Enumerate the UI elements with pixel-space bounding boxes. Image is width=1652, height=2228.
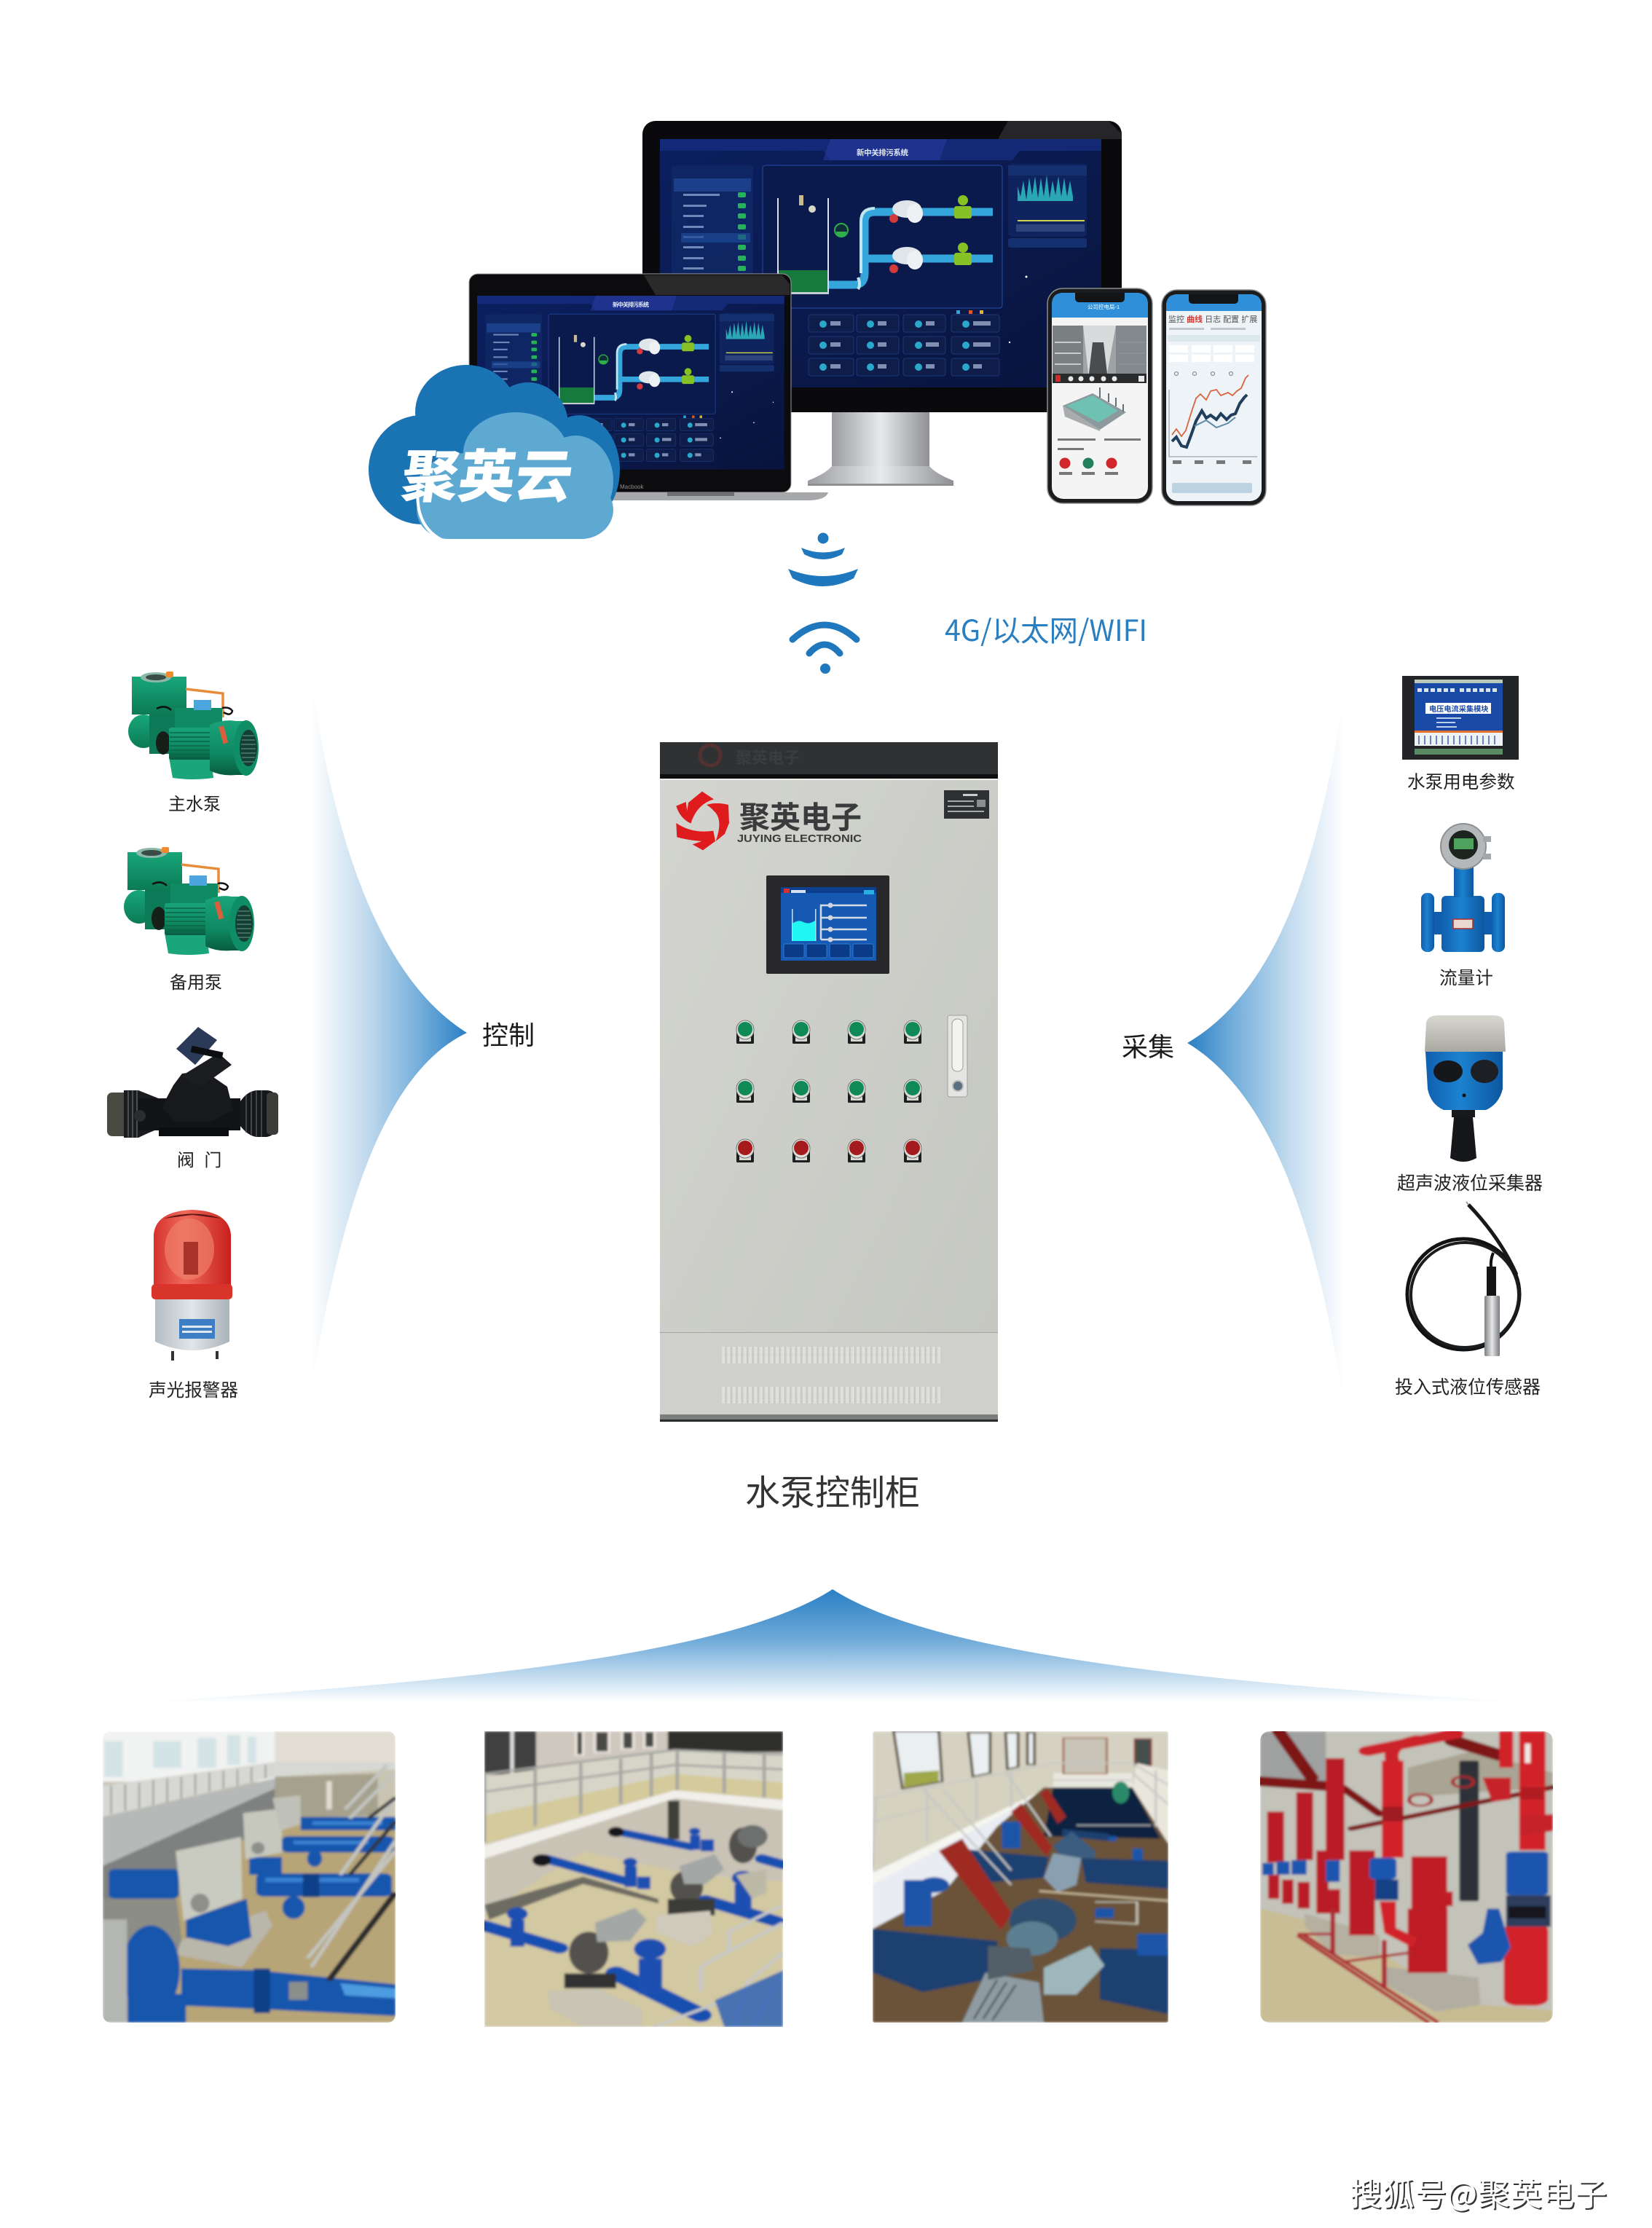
icon: signal waves upward — [788, 533, 858, 586]
phone title: 公司控电局-1 — [1087, 303, 1120, 310]
bottom fan shape — [138, 1589, 1527, 1702]
icon: red pinwheel logo — [676, 792, 729, 850]
vents — [721, 1347, 941, 1404]
control heading: 控制 — [482, 1020, 535, 1050]
label: ultrasonic sensor: 超声波液位采集器 — [1397, 1173, 1543, 1194]
icon: valve — [107, 1027, 278, 1138]
photo: long pump hall with red stairs — [873, 1731, 1168, 2023]
icon: backup pump — [124, 847, 254, 955]
cabinet title: 水泵控制柜 — [745, 1474, 920, 1513]
icon: phone with pump room video — [1047, 288, 1152, 503]
faint brand on cabinet top — [700, 745, 800, 767]
label: alarm: 声光报警器 — [149, 1380, 238, 1401]
icon: flow meter — [1421, 824, 1505, 952]
icon: phone with trend chart — [1162, 290, 1266, 505]
watermark: 搜狐号@聚英电子 — [1351, 2170, 1608, 2216]
control buttons — [736, 1020, 921, 1162]
module caption: 电压电流采集模块 — [1429, 704, 1489, 714]
laptop brand: Macbook — [620, 484, 644, 490]
photo: pump pit with blue valves — [484, 1731, 783, 2027]
icon: submersible level sensor — [1407, 1202, 1519, 1356]
faint brand on cabinet top: 聚英电子 — [736, 749, 800, 767]
icon: 聚英云 cloud logo — [369, 365, 620, 540]
laptop screen heading: 新中关排污系统 — [613, 301, 649, 308]
icon: desktop monitor with dashboard — [642, 121, 1122, 486]
watermark: 搜狐号@聚英电子 — [1350, 2168, 1607, 2215]
monitor screen heading: 新中关排污系统 — [857, 148, 909, 157]
label: valve: 阀 门 — [177, 1151, 221, 1170]
label: backup pump: 备用泵 — [170, 973, 222, 993]
network label: 4G/以太网/WIFI — [945, 607, 1147, 650]
brand name: 聚英电子 — [739, 800, 862, 835]
label: main pump: 主水泵 — [168, 795, 221, 814]
nameplate — [944, 790, 989, 819]
panel: control cabinet — [660, 742, 998, 1422]
icon: wifi — [792, 625, 857, 674]
door handle — [948, 1015, 967, 1097]
photo: fire pump room with red pipes — [1260, 1731, 1553, 2023]
icon: alarm light — [152, 1210, 232, 1361]
collect fan shape — [1187, 698, 1344, 1406]
label: flow meter: 流量计 — [1439, 968, 1493, 988]
phone tabs: 监控 曲线 日志 配置 扩展 — [1168, 314, 1257, 324]
cloud brand name: 聚英云 — [397, 430, 579, 513]
control fan shape — [311, 677, 467, 1387]
photo: pump hall with grey motors — [103, 1731, 396, 2023]
icon: laptop with dashboard — [466, 274, 828, 500]
brand subtitle: JUYING ELECTRONIC — [737, 833, 862, 845]
touch screen — [766, 875, 889, 974]
label: power parameters: 水泵用电参数 — [1407, 772, 1515, 792]
icon: ultrasonic level sensor — [1425, 1015, 1506, 1162]
collect heading: 采集 — [1122, 1032, 1174, 1062]
label: submersible sensor: 投入式液位传感器 — [1395, 1377, 1541, 1398]
icon: main pump — [128, 672, 259, 779]
icon: power module — [1402, 676, 1519, 760]
